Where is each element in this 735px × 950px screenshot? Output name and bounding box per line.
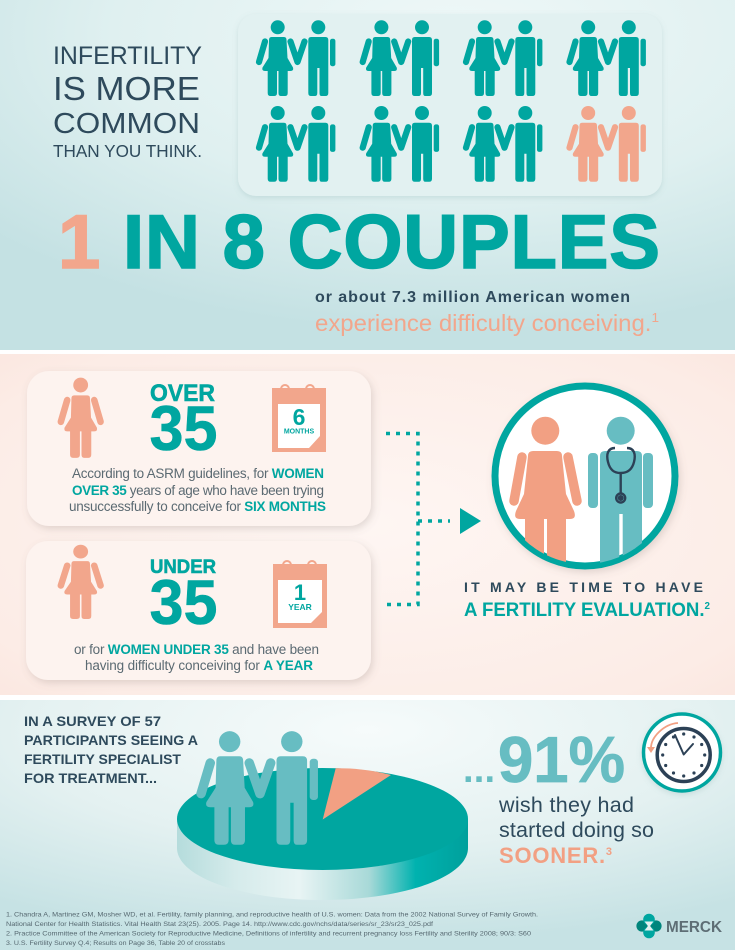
icon: calendar 6 months (272, 385, 326, 452)
text: over 35 guidance (69, 466, 326, 514)
text: wish they had started sooner: 3 (606, 846, 612, 858)
section background: middle (0, 354, 735, 695)
arrow: dotted connector to evaluation (386, 434, 481, 604)
panel: over 35 (27, 371, 371, 526)
icon: woman (61, 378, 101, 458)
couple icons row 1 (259, 20, 646, 96)
text: over 35 guidance: OVER 35 years of age who have been trying (72, 483, 324, 498)
panel: couples pictogram (238, 14, 662, 196)
logo: merck: MERCK (666, 919, 722, 936)
heading: under 35: UNDER (150, 557, 216, 578)
icon: woman (61, 545, 101, 619)
text: fertility evaluation: 2 (705, 601, 710, 612)
subheading: difficulty conceiving: experience difficulty conceiving. (315, 310, 638, 336)
icon: calendar 6 months: 6 (293, 404, 305, 430)
subheading: 7.3 million women: or about 7.3 million American women (315, 289, 630, 306)
text: under 35 guidance: having difficulty conceiving for A YEAR (85, 658, 313, 673)
icon: calendar 6 months: MONTHS (284, 428, 314, 436)
logo: merck (636, 914, 722, 938)
title: infertility is more common (53, 42, 202, 161)
stethoscope (607, 448, 635, 502)
footnotes: National Center for Health Statistics. Vital Health Stat 23(25). 2005. Page 14. http://www.cdc.gov/nchs/data/series/sr_23/sr23_025.pdf (6, 921, 433, 928)
title: infertility is more common: THAN YOU THINK. (53, 141, 202, 161)
text: survey intro: IN A SURVEY OF 57 (24, 713, 161, 729)
text: under 35 guidance: or for WOMEN UNDER 35 and have been (74, 642, 319, 657)
icon: calendar 1 year: 1 (294, 580, 306, 605)
highlighted couple icon (570, 106, 646, 182)
footnotes: 1. Chandra A, Martinez GM, Mosher WD, et al. Fertility, family planning, and reproductive health of U.S. women: Data from the 2002 National Survey of Family Growth. (6, 912, 538, 918)
icon: couple on pie (201, 731, 318, 845)
footnotes: 2. Practice Committee of the American Society for Reproductive Medicine, Definitions of infertility and recurrent pregnancy loss Fertility and Sterility 2008; 90/3: S60 (6, 930, 531, 938)
text: fertility evaluation: IT MAY BE TIME TO HAVE (464, 579, 703, 595)
stat: 91 percent: ... (463, 749, 495, 791)
icon: calendar 1 year (273, 561, 327, 628)
text: wish they had started sooner (498, 793, 654, 868)
text: wish they had started sooner: wish they had (498, 793, 634, 817)
footnotes (6, 912, 538, 947)
title: infertility is more common: INFERTILITY (53, 42, 202, 70)
text: over 35 guidance: unsuccessfully to conceive for SIX MONTHS (69, 499, 326, 514)
text: fertility evaluation: A FERTILITY EVALUATION. (464, 600, 709, 621)
heading: over 35: OVER (150, 380, 215, 407)
text: survey intro: PARTICIPANTS SEEING A (24, 732, 198, 748)
pie slice: 9 percent (323, 768, 391, 820)
title: infertility is more common: IS MORE (53, 70, 200, 107)
heading: under 35: 35 (150, 568, 218, 638)
text: under 35 guidance (74, 642, 319, 673)
section background: bottom (0, 700, 735, 950)
text: wish they had started sooner: started doing so (499, 818, 654, 842)
text: survey intro (24, 713, 198, 786)
icon: woman and doctor in circle (495, 386, 675, 570)
text: fertility evaluation (464, 579, 710, 621)
text: survey intro: FERTILITY SPECIALIST (24, 751, 181, 767)
woman figure (514, 417, 577, 570)
doctor figure (588, 417, 653, 570)
couple icons row 2 (259, 106, 542, 182)
stat: 91 percent: 91% (498, 723, 625, 796)
text: over 35 guidance: According to ASRM guidelines, for WOMEN (72, 466, 324, 481)
icon: clock (644, 714, 720, 791)
heading: over 35: 35 (150, 394, 218, 464)
subheading: difficulty conceiving: 1 (651, 310, 659, 325)
headline: 1 in 8 couples: 1 IN 8 COUPLES (58, 200, 660, 285)
text: wish they had started sooner: SOONER. (499, 843, 605, 868)
title: infertility is more common: COMMON (53, 108, 200, 140)
footnotes: 3. U.S. Fertility Survey Q.4; Results on Page 36, Table 20 of crosstabs (6, 940, 226, 947)
icon: calendar 1 year: YEAR (288, 602, 312, 612)
section background: top (0, 0, 735, 350)
chart: 3d pie (177, 768, 468, 900)
text: survey intro: FOR TREATMENT... (24, 770, 157, 786)
panel: under 35 (26, 541, 371, 680)
